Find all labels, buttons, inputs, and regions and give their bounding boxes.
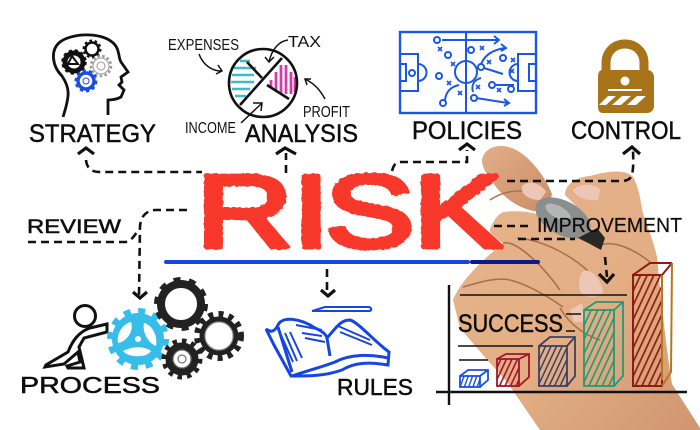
icon: hand holding marker [453,146,700,430]
heading: success: SUCCESS [458,310,563,338]
icon: black gear right [197,314,241,358]
arrow: to strategy [78,148,202,172]
bar 1 blue [460,370,488,387]
heading: process: PROCESS [20,372,160,398]
label: income: INCOME [185,120,236,137]
heading: policies: POLICIES [412,117,522,145]
label: tax: TAX [288,34,321,51]
chart: analysis pie [199,40,325,123]
heading: strategy: STRATEGY [29,120,156,148]
gear: black [63,51,85,73]
heading: control: CONTROL [571,117,681,145]
label: profit: PROFIT [303,104,350,121]
icon: strategy head with gears [53,35,128,117]
label: review: REVIEW [27,217,121,238]
title: risk: RISK [196,155,503,269]
marker pen [529,189,597,247]
heading: analysis: ANALYSIS [245,120,358,148]
arrow: review to process [28,210,187,298]
label: expenses: EXPENSES [168,37,239,54]
arrows on pie [199,40,325,123]
arrow: to analysis [276,148,296,173]
icon: figure pushing gear [45,306,107,368]
icon: black gear bottom [164,341,200,377]
arrow: to policies [392,144,475,171]
bar 5 dark red [633,263,672,386]
axes [436,285,687,405]
icon: open book [266,307,389,376]
heading: improvement: IMPROVEMENT [537,215,682,237]
bar 2 red [497,354,529,386]
gear: blue [76,72,96,90]
gear: small black [84,41,100,57]
icon: cyan gear [110,311,166,367]
icon: black gear large [156,280,206,328]
arrow: to control [507,147,640,181]
icon: padlock [598,44,654,113]
arrow: improvement [494,226,614,282]
divider: blue line [164,260,540,264]
fingernails [522,183,603,322]
pen [312,307,371,311]
bar 4 green [584,302,623,386]
icon: policies playbook field [400,32,536,113]
arrow: to rules [321,269,335,296]
bar 3 navy [539,337,575,386]
gear: grey [91,56,111,76]
chart: success bars [436,263,687,405]
finger creases [463,191,650,340]
heading: rules: RULES [337,374,413,400]
